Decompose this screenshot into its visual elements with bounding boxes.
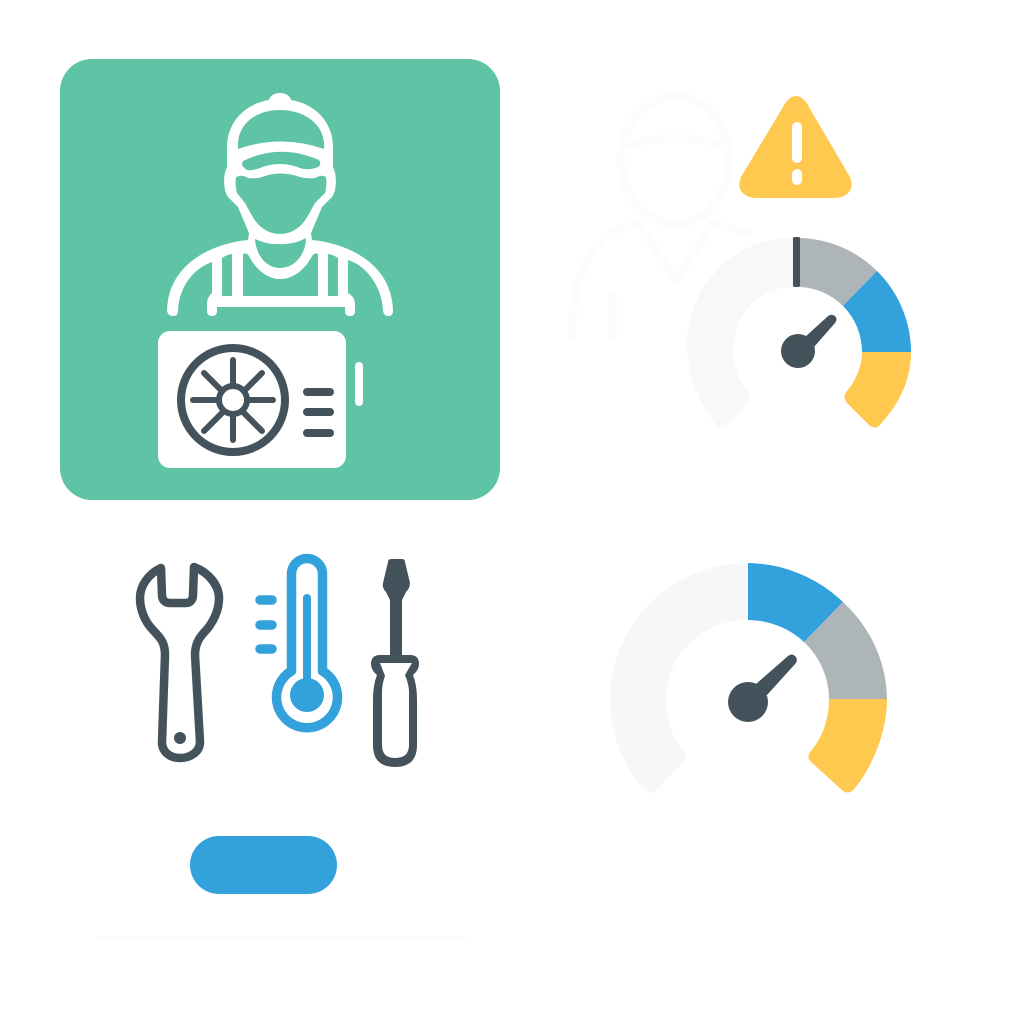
side pill — [355, 362, 363, 406]
button: blue pill — [190, 836, 337, 894]
segment: blue — [748, 563, 843, 642]
needle — [781, 315, 836, 368]
thermometer ticks — [260, 600, 272, 649]
gauge: lower — [610, 563, 887, 793]
segment: gray — [800, 238, 877, 306]
icon: fan — [181, 348, 285, 452]
icon: wrench — [140, 567, 219, 758]
icon: technician — [167, 93, 393, 316]
faint baseline — [95, 937, 470, 939]
segment: gray — [804, 602, 887, 699]
gauge track — [687, 238, 793, 428]
icon: screwdriver — [371, 559, 419, 767]
ghost person — [572, 96, 748, 335]
AC unit body — [158, 331, 346, 468]
gauge: upper — [687, 237, 911, 428]
AC vent lines — [307, 392, 330, 433]
segment: yellow — [808, 699, 887, 793]
needle — [728, 654, 797, 722]
panel: technician and AC unit — [60, 59, 500, 500]
icon: warning triangle — [739, 96, 852, 198]
icon: thermometer — [260, 558, 337, 728]
gauge track — [610, 563, 748, 793]
segment: yellow — [844, 352, 911, 428]
tick mark — [793, 237, 800, 287]
segment: blue — [843, 271, 911, 352]
